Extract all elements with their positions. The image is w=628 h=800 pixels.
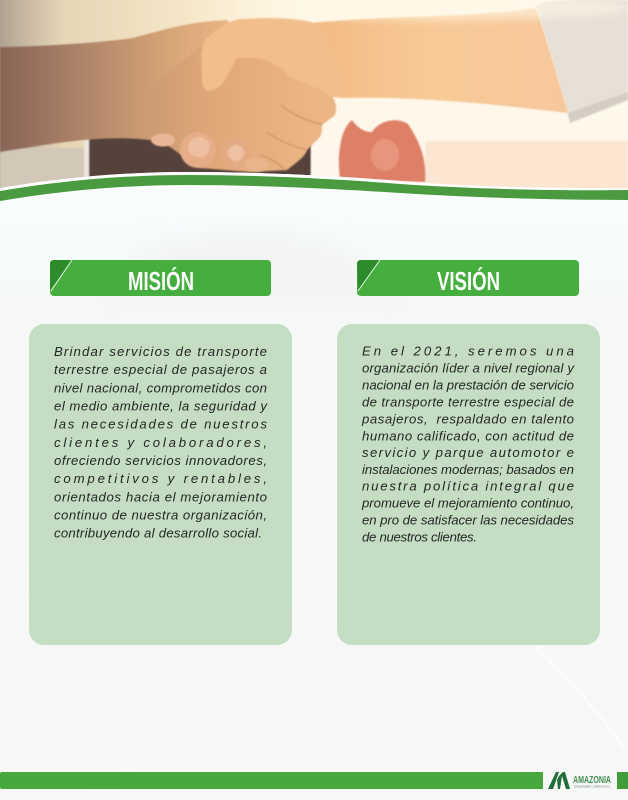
heading: misión [50, 260, 271, 296]
heading: visión: VISIÓN [437, 266, 500, 296]
sunlight glow [336, 1, 624, 24]
misión text block: orientados hacia el mejoramiento [54, 490, 267, 504]
blurred table [0, 137, 628, 188]
heading: visión [357, 260, 579, 296]
fingers and hand body [167, 48, 337, 173]
misión text block: clientes y colaboradores, [54, 435, 267, 450]
fingertips [151, 132, 268, 172]
header photo: handshake [0, 0, 628, 201]
misión text block [54, 344, 268, 540]
visión text block: nuestra política integral que [362, 478, 574, 494]
panel: visión [337, 324, 600, 645]
logo: amazonia: AMAZONIA [573, 775, 611, 786]
misión text block: contribuyendo al desarrollo social. [54, 526, 262, 540]
knuckle creases [260, 105, 322, 170]
visión text block: humano calificado, con actitud de [362, 428, 574, 444]
misión text block: ofreciendo servicios innovadores, [54, 453, 267, 468]
blurred mug [338, 119, 426, 183]
left arm [0, 19, 230, 153]
visión text block: pasajeros, respaldado en talento [361, 412, 574, 426]
visión text block [361, 344, 575, 544]
visión text block: servicio y parque automotor e [362, 445, 574, 460]
logo: amazonia [548, 772, 611, 789]
misión text block: las necesidades de nuestros [54, 416, 267, 432]
thumb [201, 18, 345, 97]
photo backdrop [0, 0, 532, 188]
wave divider [0, 172, 628, 201]
misión text block: continuo de nuestra organización, [54, 508, 267, 522]
logo mark [548, 772, 570, 789]
misión text block: terrestre especial de pasajeros a [54, 362, 267, 377]
visión text block: en pro de satisfacer las necesidades [362, 512, 574, 528]
misión text block: nivel nacional, comprometidos con [54, 380, 267, 396]
logo: amazonia: CONSULTORES Y LOGÍSTICA S.A.S [574, 784, 610, 788]
visión text block: organización líder a nivel regional y [362, 360, 575, 376]
right arm [300, 8, 568, 113]
sleeve [536, 0, 628, 123]
visión text block: En el 2021, seremos una [362, 344, 574, 358]
visión text block: nacional en la prestación de servicio [362, 378, 574, 392]
visión text block: de nuestros clientes. [362, 530, 477, 544]
misión text block: competitivos y rentables, [54, 471, 267, 486]
misión text block: Brindar servicios de transporte [54, 344, 267, 359]
visión text block: instalaciones modernas; basados en [362, 462, 574, 477]
panel: misión [29, 324, 292, 645]
visión text block: de transporte terrestre especial de [362, 394, 574, 410]
footer band [0, 772, 628, 789]
misión text block: el medio ambiente, la seguridad y [54, 398, 268, 414]
visión text block: promueve el mejoramiento continuo, [361, 496, 574, 510]
heading: misión: MISIÓN [128, 266, 194, 296]
